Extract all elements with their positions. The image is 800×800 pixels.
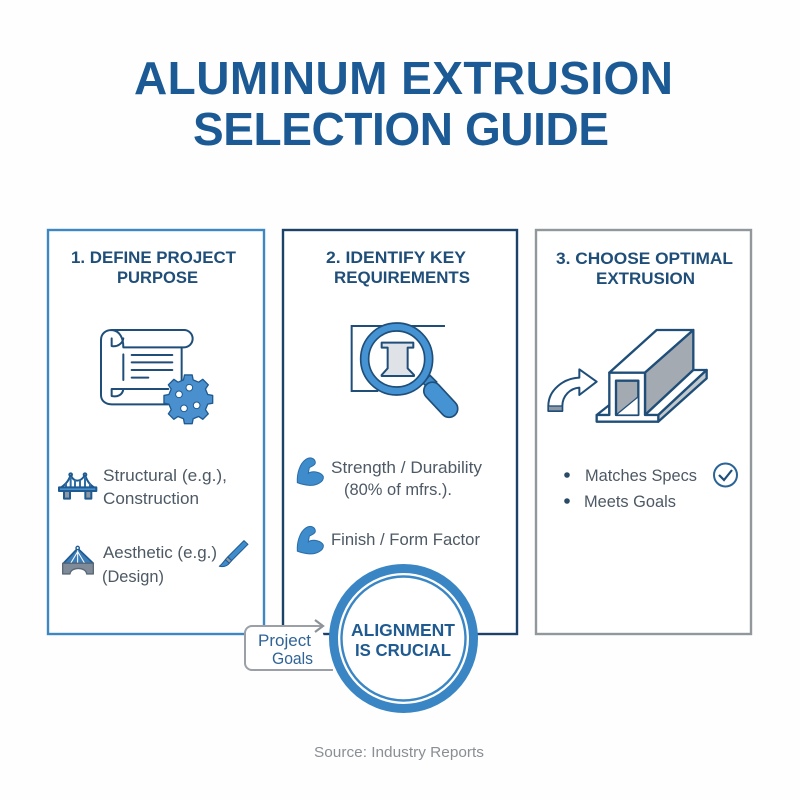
icon: flexed arm 2 (297, 526, 323, 554)
text: aesthetic (102, 544, 217, 586)
icon: paint brush (219, 541, 248, 567)
heading: step 3 (556, 249, 733, 288)
icon: suspension bridge (59, 473, 96, 499)
callout: project goals: Goals (272, 650, 313, 668)
panel: define project purpose (48, 230, 264, 634)
heading: step 1 (71, 248, 237, 287)
icon: check mark (714, 464, 737, 486)
icon: curved arrow (548, 369, 597, 411)
icon: flexed arm 1 (297, 458, 323, 485)
heading: step 2 (326, 248, 470, 287)
source note: Source: Industry Reports (314, 744, 484, 761)
icon: blueprint scroll with gear (101, 330, 213, 424)
heading: step 1: 1. DEFINE PROJECT (71, 248, 237, 267)
icon: cable-stayed bridge (63, 546, 93, 574)
icon: extruded aluminum profile (597, 330, 707, 422)
icon: magnifier over I-beam (352, 323, 461, 421)
text: strength (331, 459, 483, 499)
list: matches specs, meets goals: Matches Specs (585, 467, 697, 485)
heading: step 3: 3. CHOOSE OPTIMAL (556, 249, 733, 268)
heading: step 3: EXTRUSION (596, 269, 695, 288)
text: structural: Construction (103, 490, 199, 508)
text: structural: Structural (e.g.), (103, 467, 227, 485)
callout: project goals (245, 620, 333, 670)
list: matches specs, meets goals: Meets Goals (584, 493, 676, 511)
title (134, 52, 673, 155)
callout: alignment is crucial (334, 568, 474, 708)
list: matches specs, meets goals (564, 467, 697, 511)
icon: gear (164, 375, 213, 424)
title: SELECTION GUIDE (193, 103, 609, 155)
panel: identify key requirements (283, 230, 517, 634)
title: ALUMINUM EXTRUSION (134, 52, 673, 104)
heading: step 2: REQUIREMENTS (334, 268, 470, 287)
text: finish: Finish / Form Factor (331, 531, 481, 549)
heading: step 2: 2. IDENTIFY KEY (326, 248, 467, 267)
callout: project goals: Project (258, 632, 311, 650)
panel: choose optimal extrusion (536, 230, 751, 634)
callout: alignment is crucial: IS CRUCIAL (355, 640, 451, 660)
callout: alignment is crucial: ALIGNMENT (351, 620, 455, 640)
text: aesthetic: (Design) (102, 568, 164, 586)
text: strength: Strength / Durability (331, 459, 483, 477)
heading: step 1: PURPOSE (117, 268, 198, 287)
text: strength: (80% of mfrs.). (344, 481, 452, 499)
text: structural (103, 467, 227, 508)
text: aesthetic: Aesthetic (e.g.) (103, 544, 217, 562)
